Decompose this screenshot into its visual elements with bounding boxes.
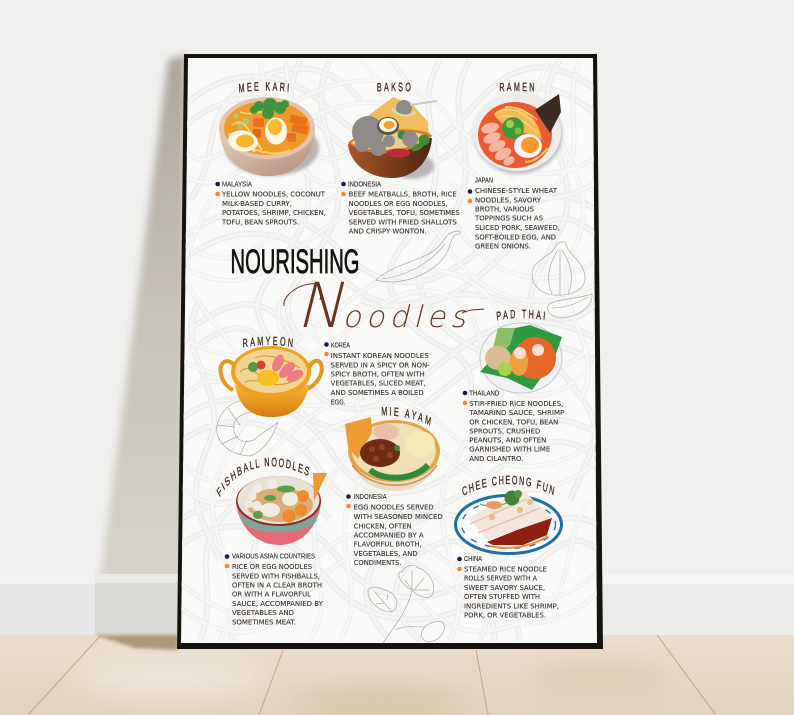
description: RICE OR EGG NOODLES bbox=[232, 563, 312, 571]
description bbox=[232, 563, 324, 626]
heading: Mee Kari: MEE KARI bbox=[238, 82, 289, 92]
description: CONDIMENTS. bbox=[354, 559, 402, 567]
heading: Mee Kari bbox=[238, 82, 289, 92]
description: AND CRISPY WONTON. bbox=[349, 227, 427, 235]
panel: Mie Ayam bbox=[345, 406, 443, 567]
description: NOODLES OR EGG NOODLES, bbox=[349, 200, 448, 208]
description: SOMETIMES MEAT. bbox=[232, 618, 296, 626]
description bbox=[464, 565, 559, 619]
description: STIR-FRIED RICE NOODLES, bbox=[469, 400, 563, 408]
description: FLAVORFUL BROTH, bbox=[354, 541, 422, 549]
description: AND SOMETIMES A BOILED bbox=[331, 389, 424, 397]
description: WITH SEASONED MINCED bbox=[354, 513, 443, 521]
title: Noodles script: Noodles bbox=[292, 270, 485, 342]
poster shadow on wall bbox=[98, 51, 188, 574]
bullet: description bbox=[463, 401, 467, 405]
description: SERVED IN A SPICY OR NON- bbox=[331, 361, 430, 369]
description: AND CILANTRO. bbox=[469, 455, 523, 463]
description: TOFU, BEAN SPROUTS. bbox=[221, 218, 299, 226]
bullet: description bbox=[215, 192, 220, 196]
heading: Ramen: RAMEN bbox=[500, 82, 534, 92]
description: OFTEN STUFFED WITH bbox=[464, 593, 540, 601]
icon: cilantro sketch bbox=[368, 565, 444, 643]
description: VEGETABLES, SLICED MEAT, bbox=[331, 380, 426, 388]
description: SWEET SAVORY SAUCE, bbox=[464, 584, 545, 592]
bullet: country bbox=[457, 557, 462, 561]
description: OR WITH A FLAVORFUL bbox=[232, 591, 311, 599]
bullet: description bbox=[457, 567, 462, 571]
description: BEEF MEATBALLS, BROTH, RICE bbox=[349, 191, 457, 199]
description: OR CHICKEN, TOFU, BEAN bbox=[469, 418, 558, 426]
panel: Chee Cheong Fun bbox=[454, 476, 563, 619]
illustration: curry noodle bowl bbox=[219, 97, 319, 176]
illustration: meatball bowl bbox=[348, 97, 437, 179]
illustration: pad thai on leaf bbox=[480, 323, 562, 393]
description bbox=[474, 187, 560, 250]
heading: Pad Thai: PAD THAI bbox=[496, 310, 545, 320]
bullet: description bbox=[324, 352, 329, 356]
description: BROTH, VARIOUS bbox=[475, 205, 534, 213]
bullet: description bbox=[468, 199, 472, 203]
description: STEAMED RICE NOODLE bbox=[464, 565, 547, 573]
description: EGG. bbox=[331, 398, 346, 406]
description bbox=[349, 191, 460, 235]
illustration: golden pot bbox=[220, 346, 322, 417]
poster frame bbox=[177, 54, 603, 649]
title: NOURISHING: NOURISHING bbox=[230, 243, 360, 281]
country label: INDONESIA bbox=[348, 181, 381, 188]
description: CHINESE-STYLE WHEAT bbox=[475, 187, 558, 195]
country label: CHINA bbox=[464, 556, 482, 563]
description: GREEN ONIONS. bbox=[475, 242, 531, 250]
country label: INDONESIA bbox=[354, 494, 387, 501]
panel: Ramyeon bbox=[218, 336, 430, 417]
illustration: rice noodle rolls bbox=[456, 490, 562, 554]
description: PEANUTS, AND OFTEN bbox=[469, 437, 546, 445]
panel: Ramen bbox=[468, 82, 564, 250]
description: ROLLS SERVED WITH A bbox=[464, 575, 537, 583]
description: SERVED WITH FRIED SHALLOTS bbox=[349, 218, 457, 226]
bullet: country bbox=[215, 182, 220, 186]
poster paper bbox=[170, 55, 610, 647]
description: MILK-BASED CURRY, bbox=[222, 200, 292, 208]
heading: Ramyeon: RAMYEON bbox=[242, 336, 293, 348]
heading: Bakso: BAKSO bbox=[377, 82, 411, 92]
baseboard bbox=[0, 574, 794, 635]
illustration: ramen bowl bbox=[473, 93, 562, 174]
description: TOPPINGS SUCH AS bbox=[474, 215, 543, 223]
bullet: description bbox=[225, 564, 229, 568]
bullet: country bbox=[463, 391, 467, 395]
description: VEGETABLES AND bbox=[232, 609, 294, 617]
description: VEGETABLES, TOFU, SOMETIMES bbox=[349, 209, 460, 217]
description bbox=[221, 191, 326, 226]
bullet: country bbox=[324, 342, 329, 347]
heading: Ramyeon bbox=[242, 336, 293, 348]
heading: Fishball Noodles: FISHBALL NOODLES bbox=[216, 458, 310, 497]
description: CHICKEN, OFTEN bbox=[354, 522, 412, 530]
description: EGG NOODLES SERVED bbox=[354, 504, 434, 512]
panel: Pad Thai bbox=[462, 310, 564, 463]
icon: shrimp sketch bbox=[217, 398, 278, 456]
panel: Mee Kari bbox=[215, 82, 326, 226]
country label: JAPAN bbox=[475, 177, 493, 184]
bullet: description bbox=[341, 192, 346, 196]
description bbox=[354, 504, 443, 567]
description: POTATOES, SHRIMP, CHICKEN, bbox=[222, 209, 326, 217]
description: SPICY BROTH, OFTEN WITH bbox=[331, 370, 425, 378]
description: ACCOMPANIED BY A bbox=[354, 531, 424, 539]
description: SLICED PORK, SEAWEED, bbox=[475, 224, 560, 232]
description: INGREDIENTS LIKE SHRIMP, bbox=[464, 602, 559, 610]
description: OFTEN IN A CLEAR BROTH bbox=[232, 581, 322, 589]
country label: KOREA bbox=[331, 342, 350, 349]
bullet: country bbox=[225, 554, 229, 559]
country label: MALAYSIA bbox=[222, 181, 252, 188]
country label: THAILAND bbox=[469, 390, 499, 397]
description: TAMARIND SAUCE, SHRIMP bbox=[468, 409, 564, 417]
description: YELLOW NOODLES, COCONUT bbox=[221, 191, 326, 199]
description: GARNISHED WITH LIME bbox=[469, 446, 550, 454]
description: NOODLES, SAVORY bbox=[475, 196, 542, 204]
description: SOFT-BOILED EGG, AND bbox=[475, 233, 556, 241]
illustration: fishball bowl bbox=[236, 473, 327, 545]
panel: Bakso bbox=[341, 82, 460, 235]
country label: VARIOUS ASIAN COUNTRIES bbox=[232, 554, 315, 561]
description: VEGETABLES, AND bbox=[354, 550, 418, 558]
bullet: description bbox=[346, 504, 351, 508]
heading: Ramen bbox=[500, 82, 534, 92]
description bbox=[331, 352, 430, 406]
icon: chili sketch bbox=[376, 231, 460, 282]
bullet: country bbox=[341, 182, 346, 186]
description: SAUCE, ACCOMPANIED BY bbox=[232, 600, 324, 608]
illustration: chicken noodle bowl bbox=[345, 417, 440, 491]
description: SERVED WITH FISHBALLS, bbox=[232, 572, 320, 580]
icon: garlic sketch bbox=[532, 242, 592, 318]
bullet: country bbox=[346, 494, 351, 499]
heading: Bakso bbox=[377, 82, 411, 92]
description: PORK, OR VEGETABLES. bbox=[464, 611, 546, 619]
heading: Chee Cheong Fun: CHEE CHEONG FUN bbox=[462, 476, 554, 496]
description: SPROUTS, CRUSHED bbox=[469, 427, 540, 435]
bullet: country bbox=[468, 189, 472, 194]
panel: Fishball Noodles bbox=[216, 458, 327, 626]
heading: Pad Thai bbox=[496, 310, 545, 320]
wooden floor bbox=[0, 635, 794, 715]
description: INSTANT KOREAN NOODLES bbox=[331, 352, 429, 360]
heading: Mie Ayam: MIE AYAM bbox=[382, 406, 432, 426]
description bbox=[468, 400, 564, 463]
